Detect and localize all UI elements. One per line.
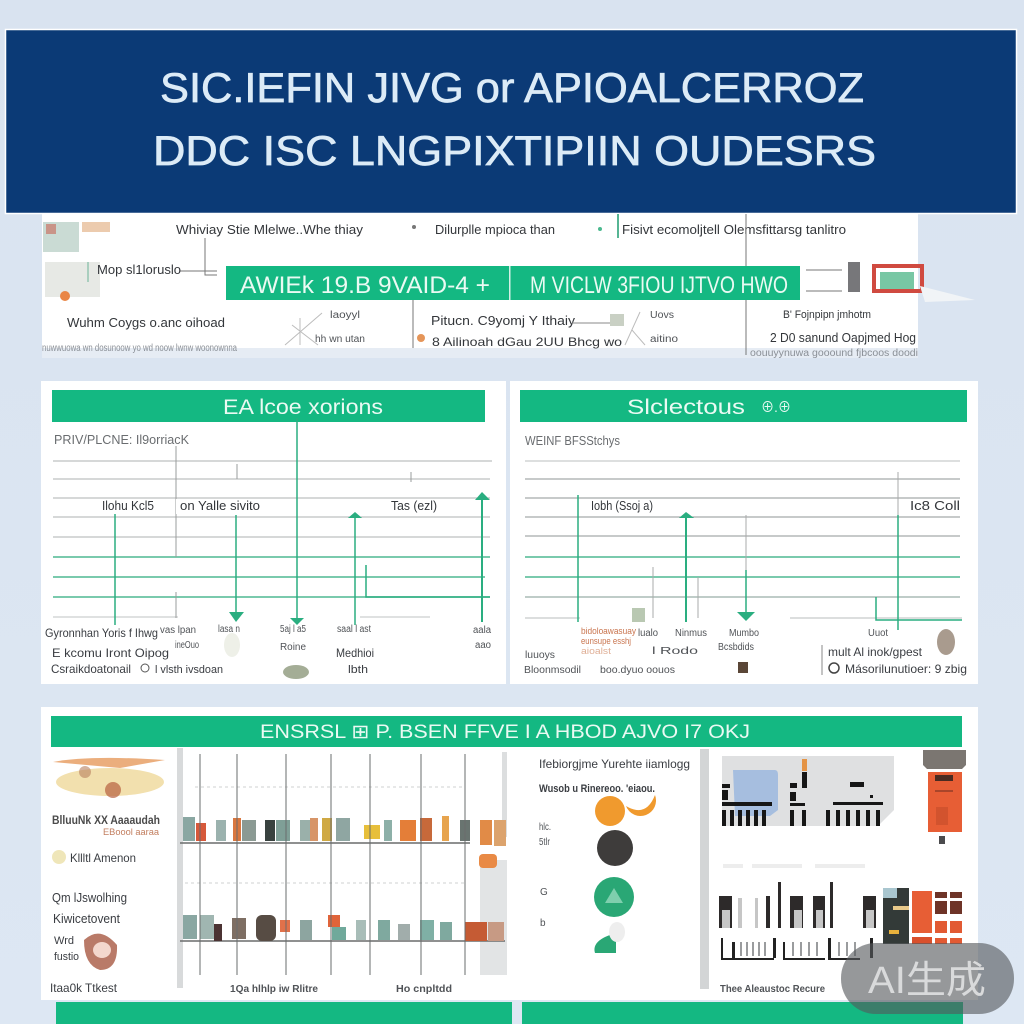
shelf uprights	[200, 754, 465, 975]
circle legend: Wusob u Rinereoo. 'eiaou.	[539, 783, 655, 795]
watermark: AI生成: AI生成	[868, 960, 986, 1002]
title banner: SIC.IEFIN JIVG or APIOALCERROZ	[160, 64, 864, 111]
line chart grid	[53, 446, 492, 618]
chart inline labels: on Yalle sivito	[180, 498, 260, 513]
icon: orange cabinet	[923, 750, 966, 844]
arrows	[578, 495, 962, 630]
heading bar	[520, 390, 967, 422]
diagram: lower machine	[719, 864, 876, 960]
icon: green half shape	[594, 922, 625, 953]
heading bar	[52, 390, 485, 422]
watermark: AI生成	[841, 943, 1014, 1014]
left sidebar column: fustio	[54, 951, 79, 963]
chart footnotes: luuoys	[525, 650, 555, 661]
left sidebar column: EBoool aaraa	[103, 827, 159, 837]
shelving chart	[177, 748, 507, 995]
left sidebar column	[50, 758, 165, 995]
circle legend: 5tlr	[539, 837, 551, 848]
panel: overview strip: Mop sl1loruslo	[97, 262, 181, 277]
chart inline labels: Ic8 Coll	[910, 498, 960, 513]
panel: right chart	[510, 381, 978, 684]
chart footnotes: E kcomu Iront Oipog	[52, 646, 169, 660]
axis labels: 5aj l a5	[280, 624, 306, 635]
chart inline labels: Ilohu Kcl5	[102, 498, 154, 513]
chart footnotes: Másorilunutioer: 9 zbig	[845, 662, 967, 676]
axis labels: Roine	[280, 642, 306, 653]
panel: left chart	[41, 381, 506, 684]
circle legend	[539, 757, 690, 953]
strip lower text: Wuhm Coygs o.anc oihoad	[67, 315, 225, 330]
diagram: upper machine	[722, 756, 894, 826]
chart label: PRIV/PLCNE: Il9orriacK	[54, 432, 189, 447]
strip top labels	[176, 222, 846, 237]
left sidebar column: Kiwicetovent	[53, 911, 120, 926]
shelving chart: Ho cnpltdd	[396, 984, 452, 995]
strip lower text: laoyyl	[330, 310, 360, 321]
left sidebar column: Itaa0k Ttkest	[50, 981, 118, 995]
axis labels: ineOuo	[175, 640, 199, 651]
chart footnotes: boo.dyuo oouos	[600, 665, 675, 676]
panel: overview strip	[42, 214, 975, 359]
column divider	[700, 749, 709, 989]
strip lower text	[42, 309, 918, 359]
chart footnotes	[45, 626, 374, 676]
axis labels: eunsupe esshj	[581, 636, 631, 646]
strip lower text: Pitucn. C9yomj Y Ithaiy	[431, 313, 576, 328]
strip connector lines	[88, 214, 842, 355]
line chart grid	[525, 461, 962, 618]
chart footnotes: Medhioi	[336, 646, 374, 660]
heading bar: EA lcoe xorions	[223, 396, 383, 419]
axis labels: Ninmus	[675, 628, 707, 639]
axis labels: lualo	[638, 628, 658, 639]
axis labels: Uuot	[868, 628, 888, 639]
icon: left illustration	[43, 222, 110, 301]
arrows	[115, 418, 490, 625]
icon: speckle	[224, 633, 309, 679]
green banner: M VICLW 3FIOU IJTVO HWO	[530, 272, 788, 299]
strip lower text: hh wn utan	[315, 334, 365, 345]
chart footnotes: l Rodo	[652, 646, 699, 657]
axis labels: Mumbo	[729, 628, 759, 639]
circle legend: b	[540, 918, 546, 929]
strip lower text: oouuyynuwa gooound fjbcoos doodi	[750, 348, 918, 359]
shelving chart: 1Qa hlhlp iw Rlitre	[230, 984, 318, 995]
panel: bottom section	[41, 707, 978, 1000]
axis labels	[160, 624, 491, 653]
next section headings	[56, 1002, 963, 1024]
green banner: AWIEk 19.B 9VAID-4 +	[240, 272, 490, 299]
diagram caption: Thee Aleaustoc Recure	[720, 984, 825, 995]
chart inline labels	[95, 498, 442, 514]
left sidebar column: BlluuNk XX Aaaaudah	[52, 813, 160, 827]
axis labels: bidoloawasuay	[581, 626, 636, 636]
title banner: DDC ISC LNGPIXTIPIIN OUDESRS	[153, 127, 876, 174]
chart inline labels: Iobh (Ssoj a)	[591, 498, 653, 513]
strip lower text: aitino	[650, 334, 679, 345]
strip lower text: 2 D0 sanund Oapjmed Hog	[770, 330, 916, 345]
diagram: orange block	[883, 888, 962, 944]
left sidebar column: Kllltl Amenon	[70, 851, 136, 865]
shelves	[180, 843, 505, 941]
axis labels	[581, 626, 888, 656]
heading bar: Slclectous	[627, 396, 745, 419]
axis labels: saal l ast	[337, 624, 371, 635]
chart footnotes	[524, 642, 967, 676]
chart footnotes: Bcsbdids	[718, 642, 754, 653]
strip lower text: Uovs	[650, 310, 674, 321]
axis labels: aala	[473, 625, 491, 636]
chart inline labels	[588, 498, 962, 514]
heading bar: ENSRSL ⊞ P. BSEN FFVE I A HBOD AJVO I7 OKJ	[260, 722, 750, 743]
strip lower text: nuwwuowa wn dosunoow yo wd noow lwnw woonownna	[42, 343, 237, 354]
icon: dark circle	[597, 830, 633, 866]
icon: right illustration	[848, 262, 975, 302]
chart footnotes: mult Al inok/gpest	[828, 645, 923, 659]
green banner	[226, 266, 800, 300]
chart footnotes: Bloonmsodil	[524, 665, 581, 676]
strip lower text: B' Fojnpipn jmhotm	[783, 309, 871, 321]
heading bar: ⊕.⊕	[761, 399, 791, 415]
strip lower text: 8 Ailinoah dGau 2UU Bhcg wo	[432, 335, 622, 349]
chart footnotes: l vlsth ivsdoan	[155, 664, 223, 676]
strip top labels: Whiviay Stie Mlelwe..Whe thiay	[176, 222, 364, 237]
heading bar	[51, 716, 962, 747]
shelf row one	[183, 816, 506, 846]
axis labels: lasa n	[218, 624, 240, 635]
chart footnotes: Gyronnhan Yoris f Ihwg	[45, 626, 158, 640]
circle legend: G	[540, 887, 548, 898]
axis labels: aao	[475, 640, 491, 651]
title banner	[6, 30, 1016, 214]
icon: green circle	[594, 877, 634, 917]
circle legend: hlc.	[539, 822, 551, 833]
shelf row two	[183, 915, 504, 941]
axis labels: vas lpan	[160, 625, 196, 636]
icon: small photos	[632, 608, 955, 673]
circle legend: Ifebiorgjme Yurehte iiamlogg	[539, 757, 690, 771]
strip top labels: Fisivt ecomoljtell Olemsfittarsg tanlitro	[622, 222, 846, 237]
axis labels: aioalst	[581, 646, 612, 656]
chart footnotes: Csraikdoatonail	[51, 662, 131, 676]
icon: orange circles	[595, 795, 656, 826]
left sidebar column: Qm lJswolhing	[52, 890, 127, 905]
chart inline labels: Tas (ezl)	[391, 498, 437, 513]
chart footnotes: lbth	[348, 664, 368, 676]
chart label: WEINF BFSStchys	[525, 433, 620, 448]
strip top labels: Dilurplle mpioca than	[435, 222, 555, 237]
left sidebar column: Wrd	[54, 935, 74, 947]
